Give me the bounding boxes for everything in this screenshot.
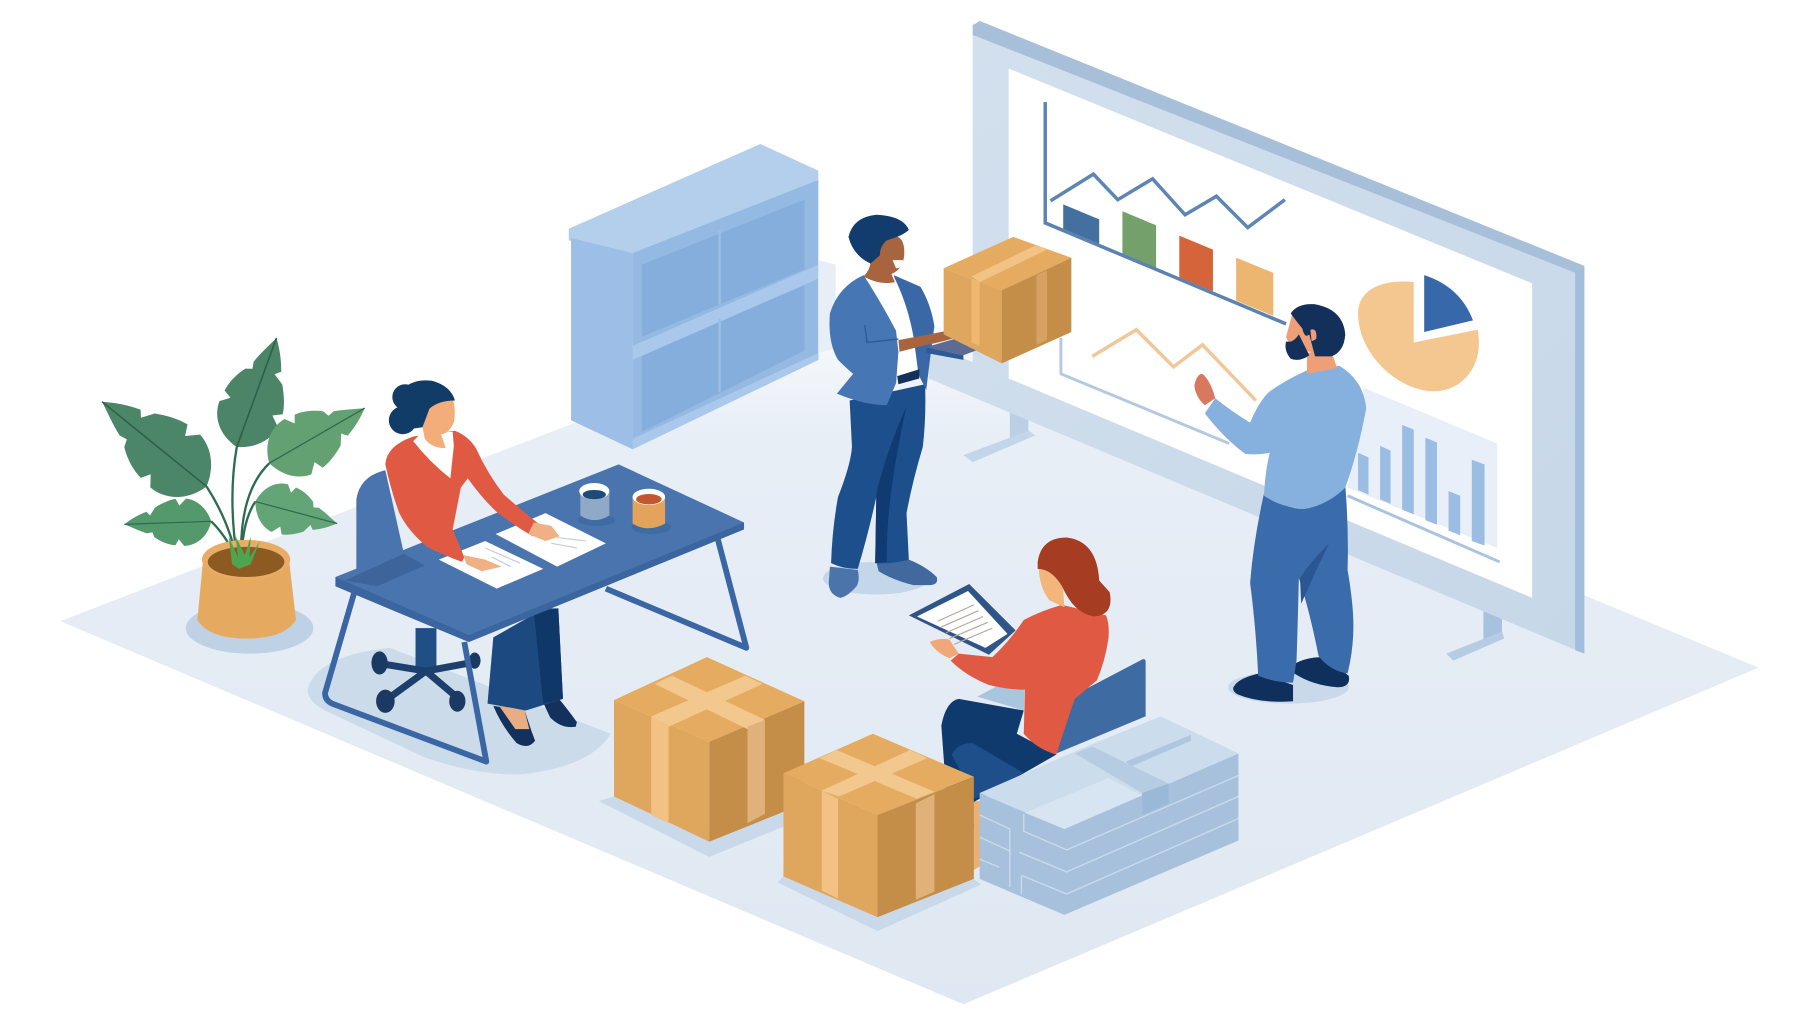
jacket front with sleeve: [829, 275, 898, 405]
desk legs: [325, 533, 746, 762]
seat: [977, 677, 1025, 711]
wrapped pallet stack: [980, 716, 1238, 915]
floor: [60, 304, 1758, 1004]
sweater: [1205, 366, 1366, 509]
tablet: [926, 339, 982, 355]
jacket back: [894, 275, 934, 390]
hands: [463, 522, 559, 571]
cardboard box held by man: [944, 237, 1071, 363]
chair back: [356, 470, 409, 575]
papers: [439, 513, 606, 589]
man pointing at board: [1194, 304, 1366, 704]
cabinet: [569, 144, 836, 449]
belt: [897, 369, 919, 384]
shirt: [864, 273, 918, 376]
cup blue: [578, 483, 615, 526]
sweater: [951, 605, 1109, 755]
woman torso: [385, 431, 540, 562]
stems: [207, 447, 269, 564]
hand: [930, 639, 959, 658]
beard: [1285, 334, 1309, 360]
hair: [1038, 538, 1110, 616]
foot beside stack: [973, 801, 982, 871]
leaf lower left: [123, 498, 212, 548]
plant base shoots: [229, 536, 260, 569]
chair back: [1056, 659, 1146, 753]
forearm: [898, 330, 959, 352]
face: [1286, 316, 1316, 353]
lower line chart: [1061, 330, 1256, 444]
leaf left: [79, 374, 229, 515]
neck: [1307, 348, 1337, 374]
neck and face: [864, 236, 904, 283]
legs: [941, 699, 1056, 827]
leaf lower right: [249, 477, 344, 548]
shoes: [1294, 657, 1349, 687]
small bar chart: [1348, 388, 1500, 562]
trousers: [831, 384, 925, 569]
tablet: [909, 584, 1016, 655]
trousers: [1250, 485, 1353, 683]
chair shadow on floor: [308, 648, 611, 774]
woman at desk with chair: [325, 380, 746, 762]
pie chart: [1358, 275, 1479, 391]
face: [1039, 567, 1064, 607]
neck and face: [420, 397, 455, 448]
hair: [1291, 304, 1345, 356]
cup orange: [631, 489, 671, 534]
whiteboard screen with frame: [929, 21, 1584, 661]
pot: [197, 560, 296, 639]
cardboard box left: [599, 657, 804, 857]
shoes: [876, 560, 937, 585]
desk top: [335, 464, 744, 642]
office chair base: [371, 628, 481, 713]
collar: [413, 432, 454, 478]
woman reading on stack: [909, 538, 1146, 871]
woman trousers and shoes: [488, 608, 577, 746]
leaf right: [254, 382, 380, 490]
bar and line chart: [1045, 102, 1286, 324]
hair: [848, 215, 909, 264]
plant: [79, 327, 380, 654]
board legs: [963, 409, 1504, 661]
cardboard box front: [778, 734, 981, 931]
leaf top: [207, 327, 307, 458]
hand: [1194, 374, 1215, 405]
hair and buns: [389, 380, 455, 434]
man holding box: [823, 215, 982, 598]
